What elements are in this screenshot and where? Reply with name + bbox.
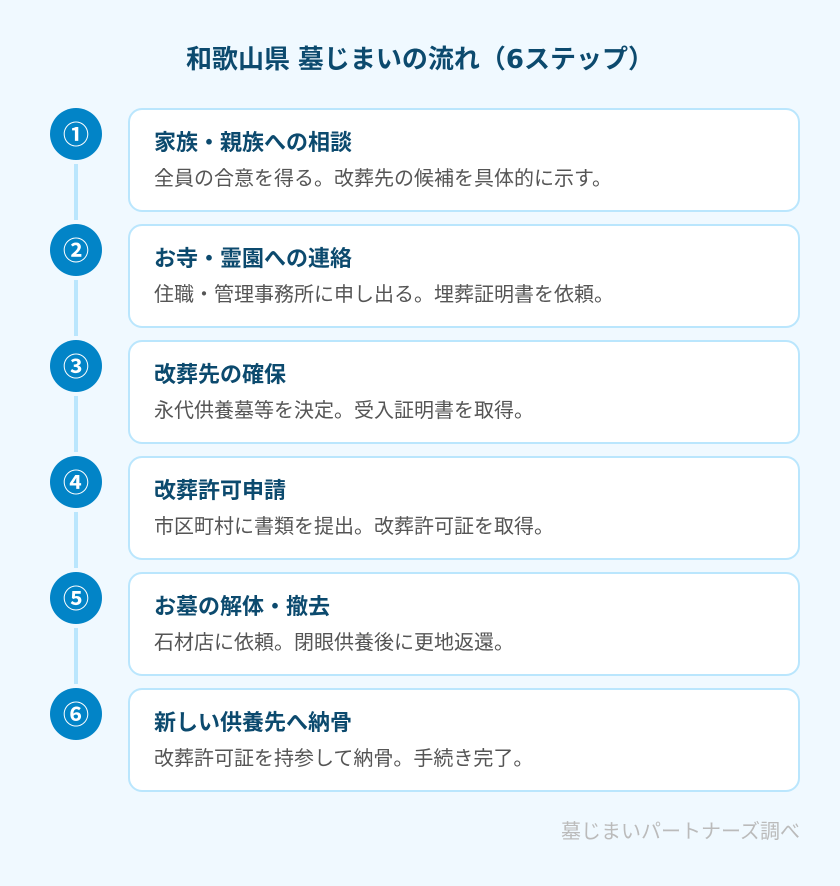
step 6 text: 改葬許可証を持参して納骨。手続き完了。 bbox=[154, 742, 533, 771]
step 5 number bbox=[50, 572, 102, 624]
step 5 text: 石材店に依頼。閉眼供養後に更地返還。 bbox=[154, 626, 514, 655]
step 4 text: 市区町村に書類を提出。改葬許可証を取得。 bbox=[154, 510, 554, 539]
connector 3 bbox=[74, 396, 78, 452]
step 5 number: ⑤ bbox=[63, 579, 89, 616]
step 3 number bbox=[50, 340, 102, 392]
step 6 card bbox=[128, 688, 800, 792]
step 2 card bbox=[128, 224, 800, 328]
step 3 card bbox=[128, 340, 800, 444]
step 6 number: ⑥ bbox=[63, 695, 89, 732]
step 4 number: ④ bbox=[63, 463, 89, 500]
step 2 number: ② bbox=[63, 231, 89, 268]
connector 1 bbox=[74, 164, 78, 220]
connector 2 bbox=[74, 280, 78, 336]
step 5 heading: お墓の解体・撤去 bbox=[154, 589, 330, 621]
step 3 text: 永代供養墓等を決定。受入証明書を取得。 bbox=[154, 394, 534, 423]
step 6 number bbox=[50, 688, 102, 740]
step 1 card bbox=[128, 108, 800, 212]
step 2 heading: お寺・霊園への連絡 bbox=[154, 241, 352, 273]
step 1 number bbox=[50, 108, 102, 160]
step 1 heading: 家族・親族への相談 bbox=[154, 125, 352, 157]
step 6 heading: 新しい供養先へ納骨 bbox=[154, 705, 352, 737]
source note: 墓じまいパートナーズ調べ bbox=[561, 815, 800, 844]
step 2 number bbox=[50, 224, 102, 276]
connector 5 bbox=[74, 628, 78, 684]
step 4 number bbox=[50, 456, 102, 508]
step 3 heading: 改葬先の確保 bbox=[154, 357, 286, 389]
step 2 text: 住職・管理事務所に申し出る。埋葬証明書を依頼。 bbox=[154, 278, 614, 307]
step 3 number: ③ bbox=[63, 347, 89, 384]
step 1 number: ① bbox=[63, 115, 89, 152]
step 1 text: 全員の合意を得る。改葬先の候補を具体的に示す。 bbox=[154, 162, 612, 191]
step 5 card bbox=[128, 572, 800, 676]
step 4 heading: 改葬許可申請 bbox=[154, 473, 286, 505]
connector 4 bbox=[74, 512, 78, 568]
title: 和歌山県 墓じまいの流れ（6ステップ） bbox=[186, 39, 654, 76]
step 4 card bbox=[128, 456, 800, 560]
